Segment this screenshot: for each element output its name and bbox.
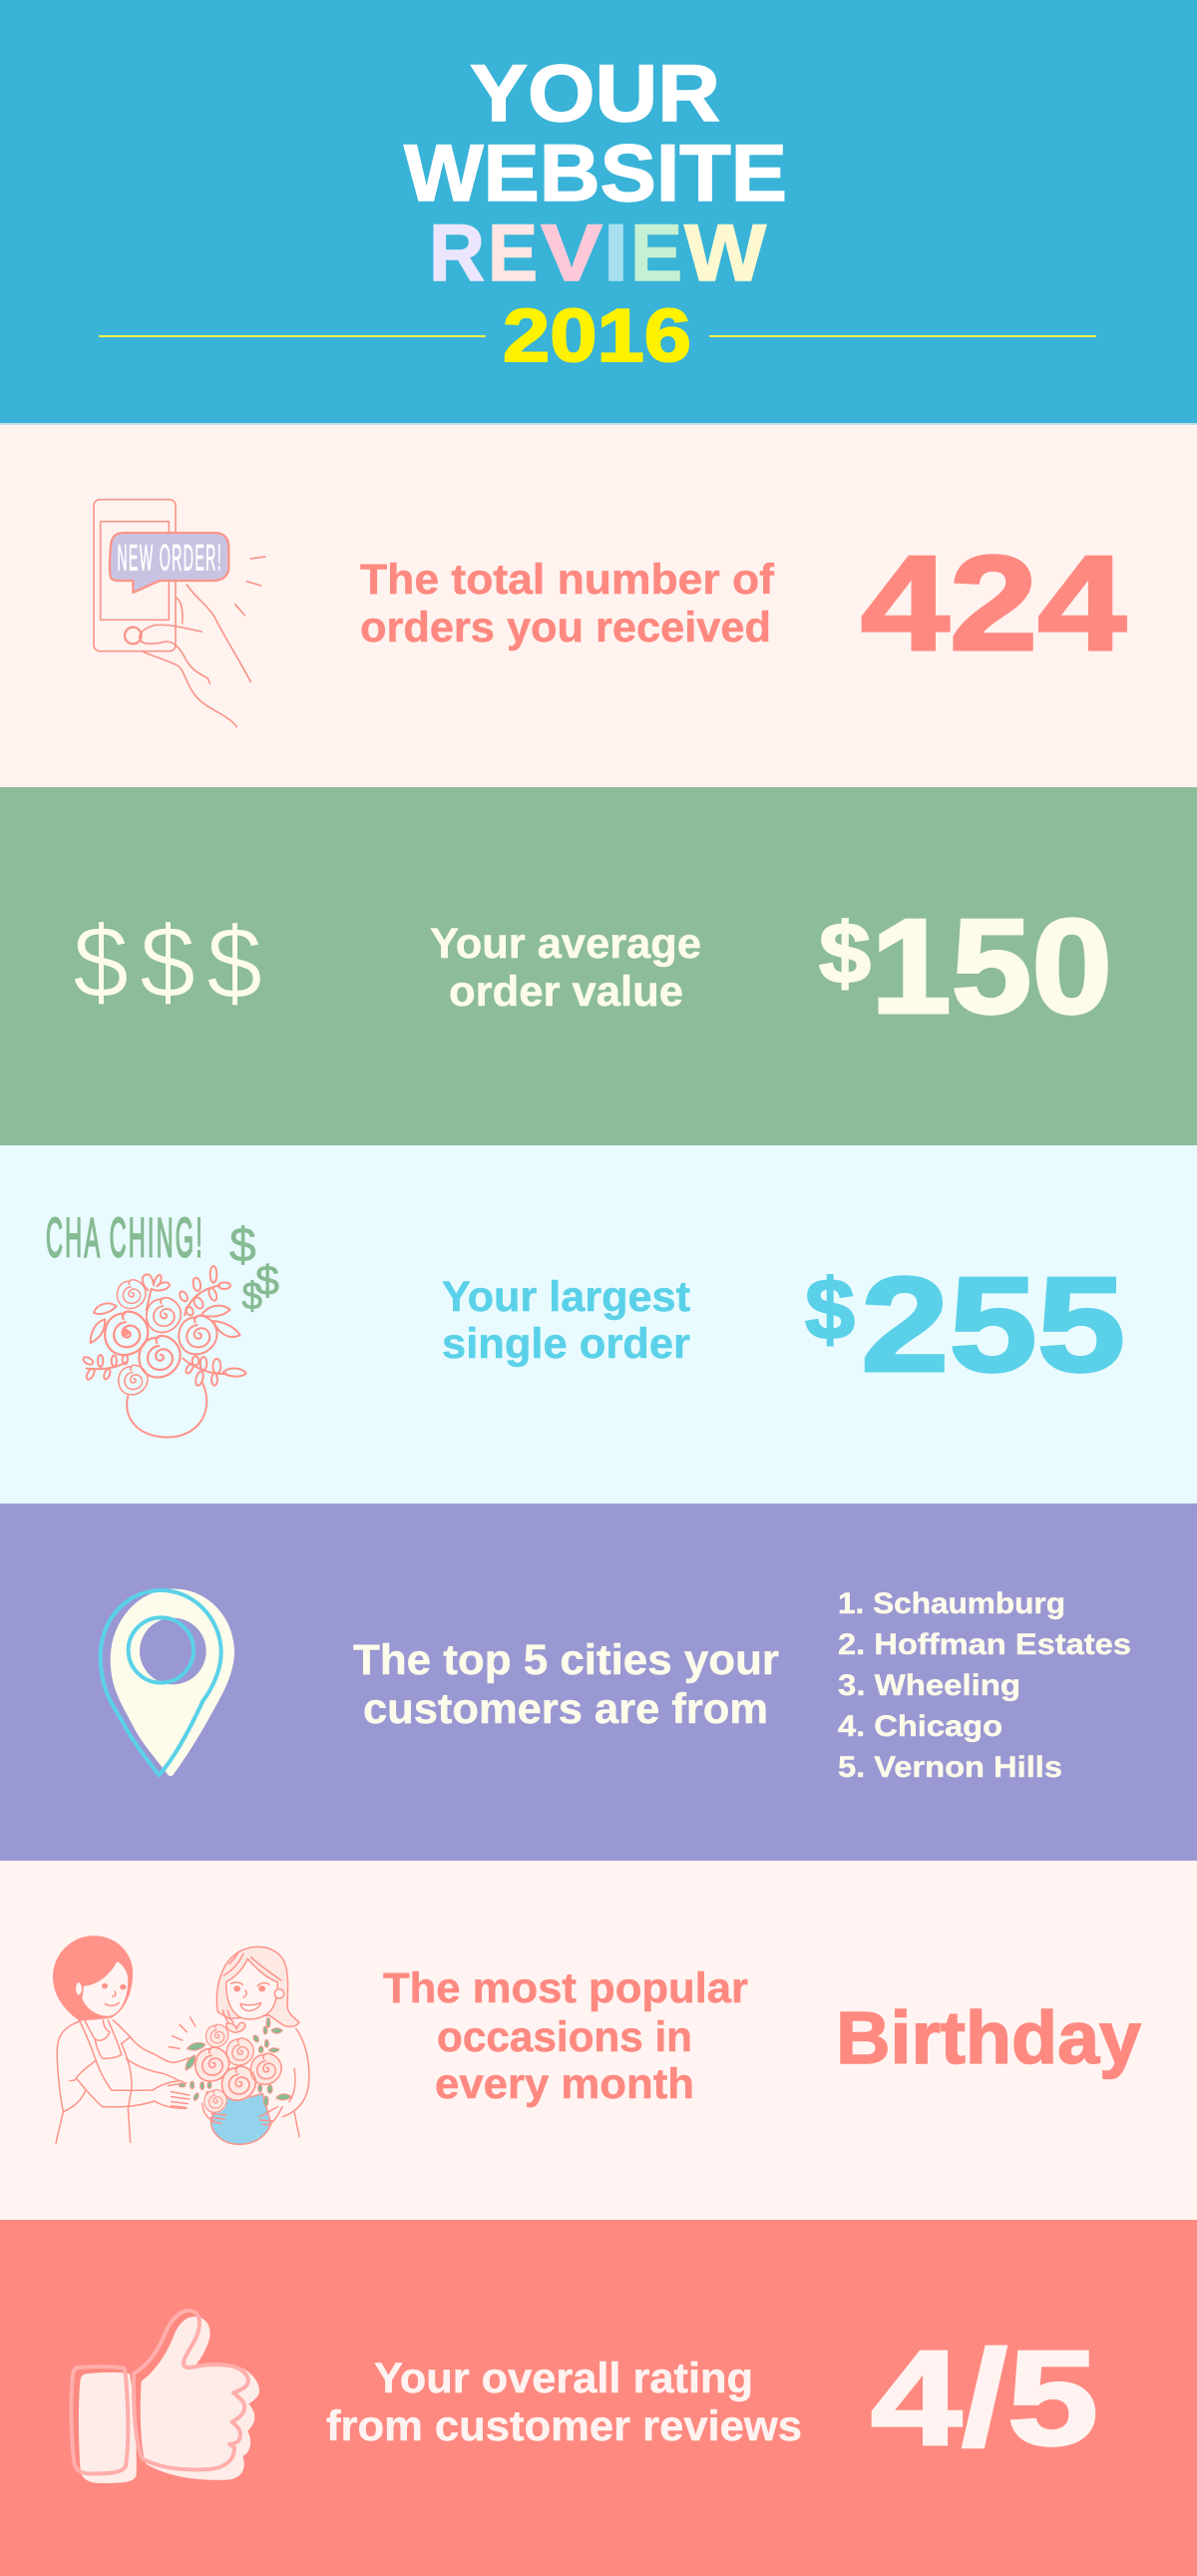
label: average order value	[430, 920, 701, 1016]
label: top cities: customers are from	[363, 1685, 768, 1733]
label: average order value: Your average	[430, 920, 701, 968]
icon: map pin	[101, 1589, 234, 1776]
illustration: vase	[211, 2093, 271, 2144]
list: cities: 1. Schaumburg	[838, 1587, 1065, 1620]
icon: thumbs up	[71, 2311, 259, 2483]
value: $150: 150	[871, 891, 1112, 1042]
label: popular occasions: every month	[435, 2060, 694, 2108]
text: cha ching: CHA CHING!	[46, 1207, 202, 1270]
label: overall rating: Your overall rating	[374, 2355, 753, 2402]
illustration: florist handing bouquet to customer	[54, 1936, 309, 2144]
title: your website: WEBSITE	[404, 129, 787, 218]
list: cities	[838, 1587, 1131, 1784]
icon: falling dollars: $	[241, 1274, 262, 1318]
label: popular occasions: occasions in	[437, 2013, 692, 2061]
icon: falling dollars: $	[255, 1257, 279, 1303]
year with rules: 2016	[503, 293, 691, 377]
label: popular occasions: The most popular	[383, 1964, 748, 2012]
panel: total orders	[0, 425, 1197, 787]
panel: overall rating	[0, 2220, 1197, 2576]
icon: three dollar signs: $	[73, 905, 129, 1020]
value: $150: $	[819, 906, 871, 1002]
title: multicoloured review: I	[603, 209, 628, 298]
panel: top cities	[0, 1503, 1197, 1861]
panel: popular occasions	[0, 1861, 1197, 2220]
icon: three dollar signs	[73, 905, 262, 1021]
icon: falling dollars	[229, 1218, 279, 1318]
icon: three dollar signs: $	[140, 905, 196, 1020]
label: top cities	[353, 1636, 779, 1733]
title: multicoloured review: W	[684, 209, 767, 298]
value: 4/5: 4/5	[871, 2323, 1098, 2473]
value: 424: 424	[861, 528, 1126, 678]
label: largest single order	[442, 1273, 690, 1368]
panel: average order value	[0, 787, 1197, 1145]
list: cities: 2. Hoffman Estates	[838, 1628, 1131, 1661]
figure: customer	[216, 1946, 309, 2137]
title: multicoloured review: E	[488, 209, 538, 298]
label: popular occasions	[383, 1964, 748, 2108]
title: your website	[404, 49, 787, 218]
icon: three dollar signs: $	[206, 906, 262, 1021]
value: birthday: Birthday	[836, 1996, 1141, 2079]
title: multicoloured review: E	[630, 209, 682, 298]
label: largest single order: single order	[442, 1320, 690, 1368]
icon: phone in hand with new order bubble	[94, 500, 265, 726]
label: top cities: The top 5 cities your	[353, 1636, 779, 1684]
label: total orders: The total number of	[360, 556, 775, 604]
value: $255: $	[805, 1262, 855, 1358]
label: overall rating: from customer reviews	[326, 2402, 802, 2450]
icon: cha ching bouquet	[46, 1207, 279, 1438]
figure: florist	[54, 1936, 190, 2143]
text: new order: NEW ORDER!	[117, 536, 221, 579]
label: overall rating	[326, 2355, 802, 2450]
icon: falling dollars: $	[229, 1218, 256, 1272]
title: multicoloured review	[429, 209, 767, 298]
panel: largest single order	[0, 1145, 1197, 1503]
label: average order value: order value	[449, 968, 683, 1016]
label: total orders	[360, 556, 775, 651]
illustration: hands and rays	[169, 2017, 282, 2125]
title: your website: YOUR	[470, 49, 720, 139]
list: cities: 4. Chicago	[838, 1710, 1002, 1743]
value: $255: 255	[861, 1249, 1125, 1400]
illustration: flowers and vase	[82, 1266, 246, 1438]
list: cities: 3. Wheeling	[838, 1669, 1020, 1702]
label: total orders: orders you received	[360, 604, 771, 651]
label: largest single order: Your largest	[442, 1273, 690, 1321]
illustration: bouquet	[179, 2018, 291, 2113]
title: multicoloured review: V	[541, 209, 602, 298]
title: multicoloured review: R	[429, 209, 485, 298]
panel: header	[0, 0, 1197, 425]
list: cities: 5. Vernon Hills	[838, 1751, 1062, 1784]
